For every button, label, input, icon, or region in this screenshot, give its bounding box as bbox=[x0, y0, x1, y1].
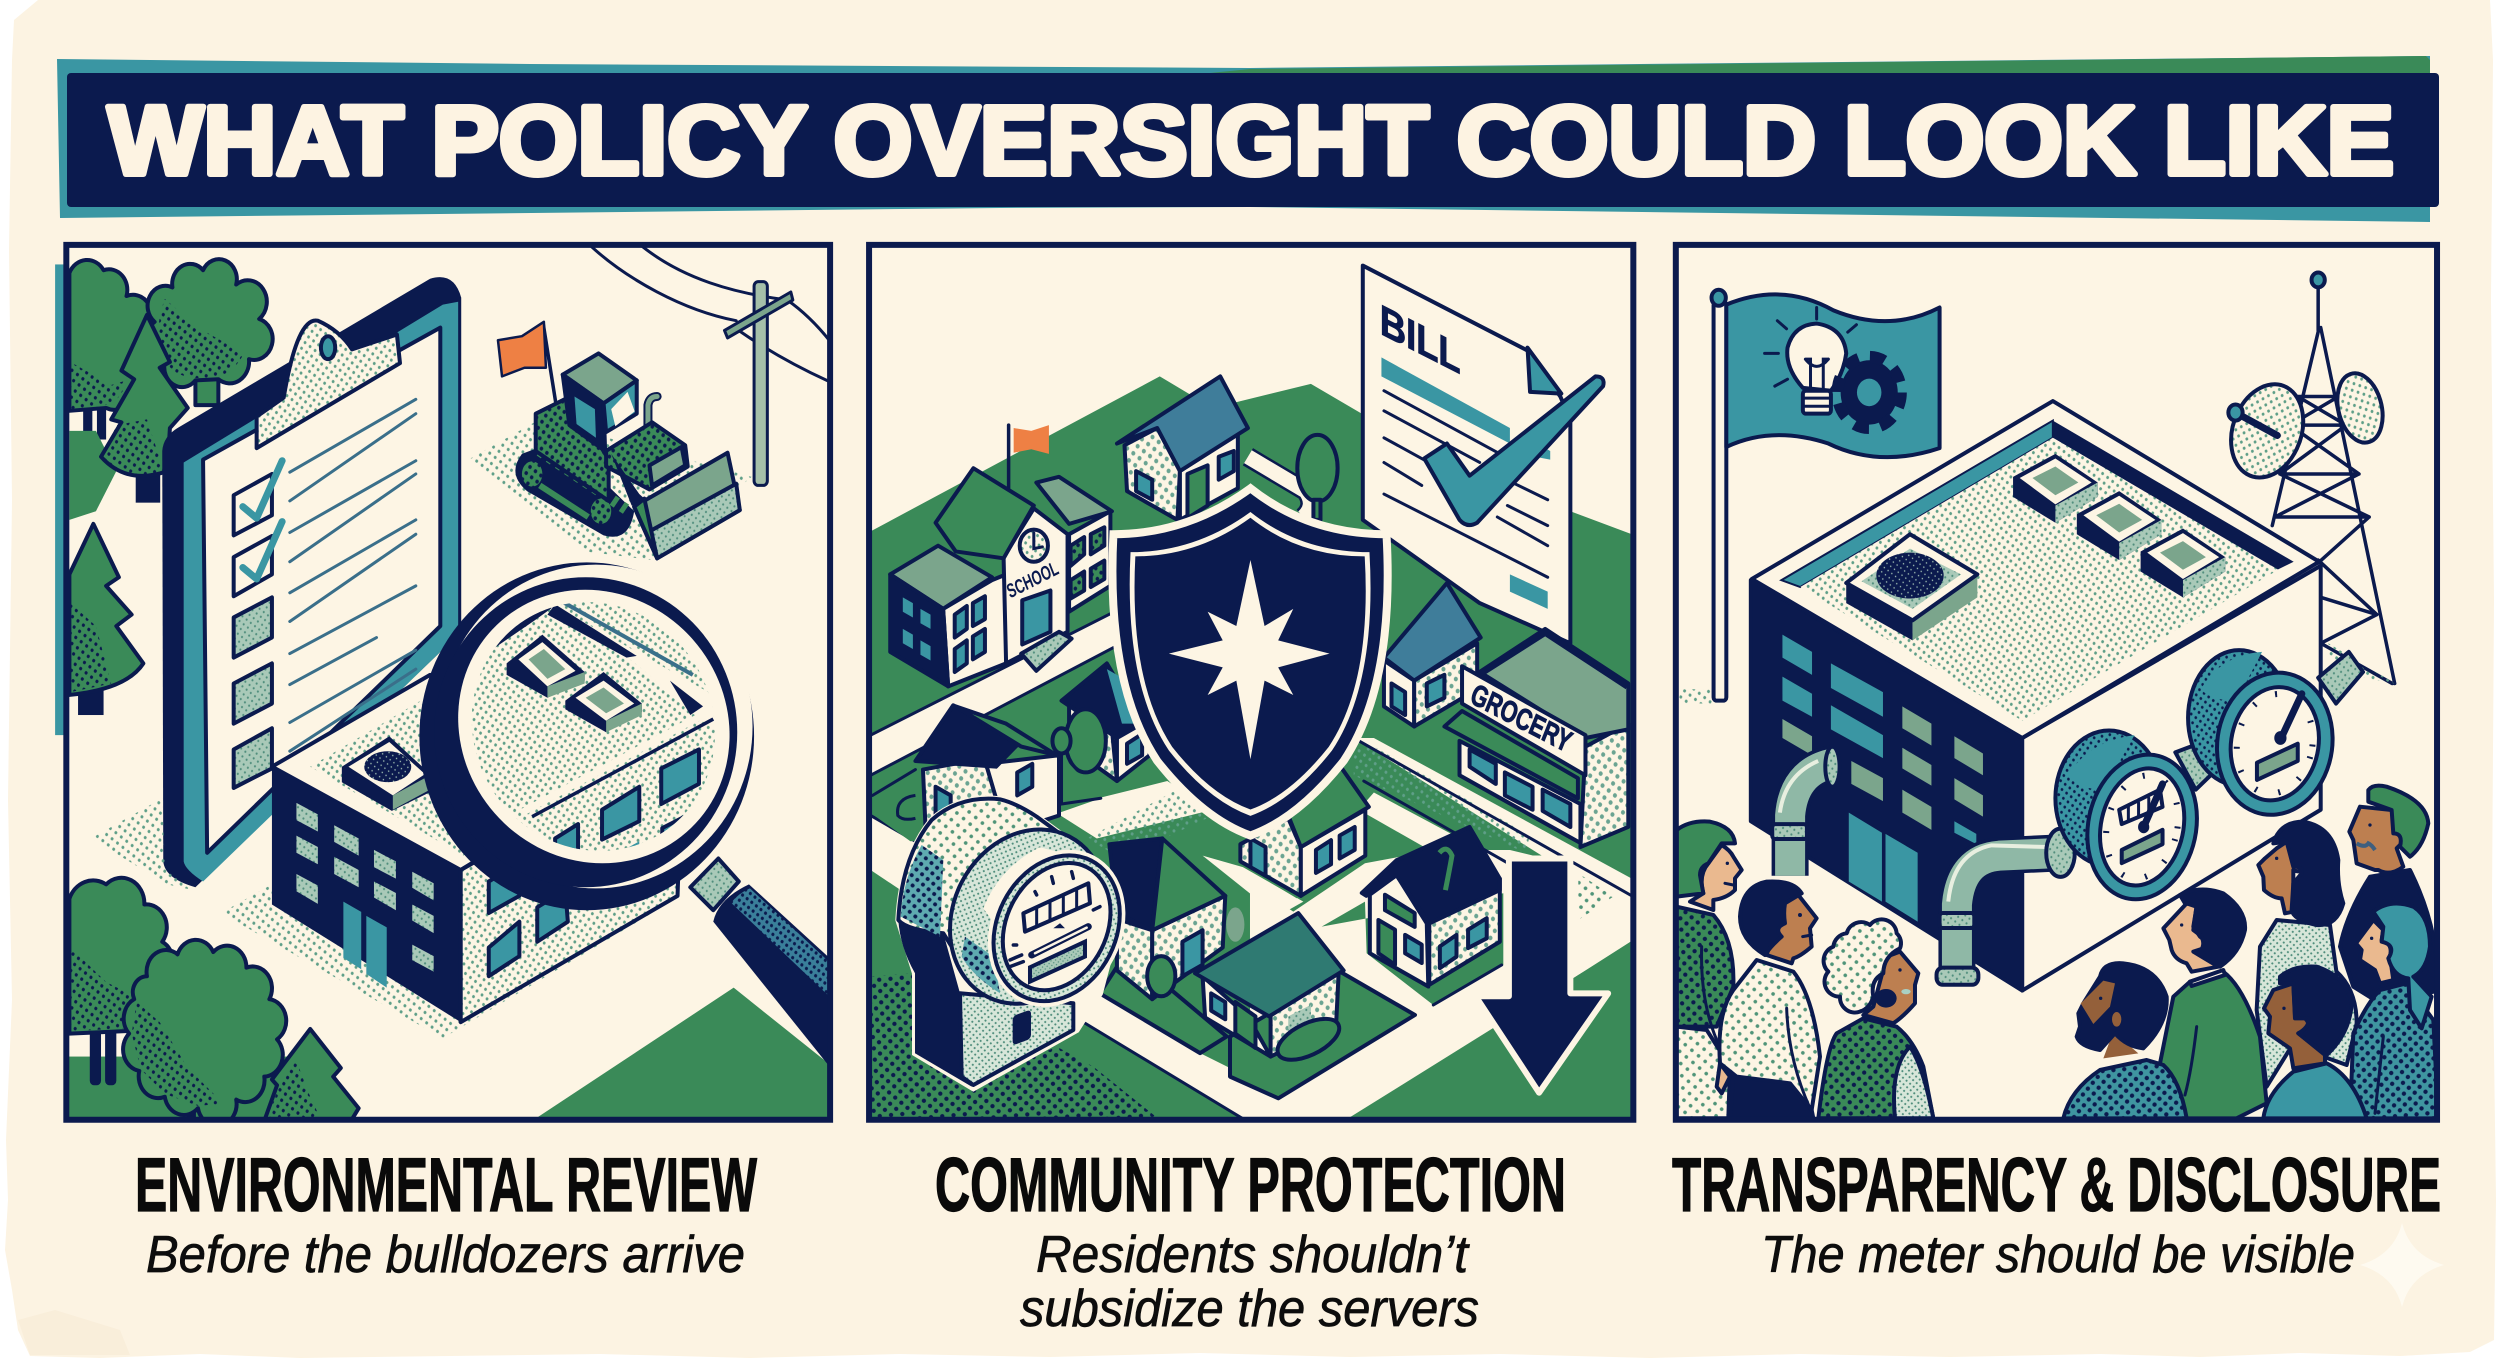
houses right of shield bbox=[1384, 583, 1481, 727]
heading: ENVIRONMENTAL REVIEW bbox=[135, 1143, 757, 1228]
checklist text lines bbox=[290, 399, 416, 751]
building windows bbox=[296, 803, 434, 972]
power lines bbox=[591, 246, 831, 485]
subheading: The meter should be visible bbox=[1761, 1226, 2355, 1284]
meter dial face bbox=[962, 826, 1152, 1031]
school flag bbox=[1007, 425, 1010, 488]
house front bbox=[1195, 913, 1344, 1068]
lawn by meter bbox=[1100, 959, 1227, 1053]
right house lawn bbox=[1322, 893, 1503, 1005]
survey flag bbox=[543, 325, 556, 405]
title banner bbox=[57, 56, 2439, 222]
heading: COMMUNITY PROTECTION bbox=[935, 1143, 1566, 1228]
meter dome bbox=[898, 799, 1087, 960]
banner teal offset bbox=[57, 56, 2430, 222]
ground shadows bbox=[91, 798, 672, 1038]
large check mark bbox=[1424, 376, 1604, 525]
grocery sign: GROCERY bbox=[1466, 677, 1577, 759]
magnified view inside lens bbox=[472, 602, 715, 851]
paper fold shading bbox=[18, 1310, 130, 1355]
data center building bbox=[1751, 401, 2363, 991]
shield with star bbox=[1112, 488, 1388, 836]
gear bbox=[1838, 357, 1901, 428]
banner navy bar bbox=[67, 73, 2439, 207]
magnified rooftop units bbox=[507, 635, 585, 698]
dark green ground by meter bbox=[870, 973, 1160, 1120]
crowd left group bbox=[1677, 821, 1933, 1118]
green field bbox=[532, 988, 831, 1121]
lower neighborhood houses bbox=[1109, 764, 1500, 1068]
rooftop fan unit bbox=[1846, 534, 1977, 640]
front house lawn bbox=[1230, 972, 1415, 1098]
meter dial rim bbox=[921, 802, 1136, 1031]
bulldozer with flag bbox=[468, 322, 752, 560]
meter base bbox=[960, 993, 1073, 1085]
subheading bbox=[1020, 1226, 1479, 1338]
house behind top bbox=[1117, 376, 1338, 520]
bill heading: BILL bbox=[1380, 295, 1461, 383]
boy in front bbox=[2263, 966, 2367, 1118]
checked box two bbox=[234, 522, 282, 596]
clipboard checklist bbox=[162, 277, 461, 887]
man with moustache bbox=[2340, 786, 2442, 1003]
houses left of shield bbox=[873, 663, 1150, 841]
teal misregistration sliver bbox=[55, 264, 68, 735]
meter digits bbox=[1023, 883, 1090, 932]
subheading: Residents shouldn’t bbox=[1036, 1226, 1470, 1284]
flag with bulb and gear bbox=[1712, 290, 1940, 701]
panel: community protection bbox=[869, 244, 1633, 1123]
electric meter bbox=[898, 799, 1152, 1088]
front pipe bbox=[1937, 829, 2075, 985]
left pipe bbox=[1772, 747, 1840, 876]
banner green offset bbox=[1200, 56, 2430, 74]
top left trees bbox=[69, 259, 273, 520]
building windows and doors bbox=[1782, 635, 1983, 922]
connector pipes bbox=[2175, 652, 2363, 790]
road outlines bbox=[871, 612, 1632, 1121]
roads bbox=[871, 612, 1632, 1121]
grocery store bbox=[1444, 629, 1628, 847]
school building bbox=[890, 425, 1112, 686]
subheading: Before the bulldozers arrive bbox=[146, 1226, 745, 1284]
resident in green sweater bbox=[2160, 890, 2267, 1118]
bearded resident bbox=[2063, 963, 2187, 1118]
house center bbox=[1240, 764, 1369, 896]
radio tower bbox=[2217, 272, 2395, 683]
north star bbox=[1169, 560, 1330, 759]
sparkle watermark bbox=[2360, 1223, 2444, 1307]
caption: environmental review bbox=[135, 1143, 757, 1284]
caption: community protection bbox=[935, 1143, 1566, 1338]
meter halo bbox=[898, 799, 1120, 1088]
bottom right roads and lawns bbox=[1230, 850, 1633, 1123]
light bulb bbox=[1765, 307, 1856, 414]
panel: transparency and disclosure bbox=[1674, 244, 2442, 1123]
house with chimney mark bbox=[1362, 827, 1500, 987]
gauge two bbox=[2188, 650, 2349, 832]
panel: environmental review bbox=[55, 244, 831, 1126]
bottom left trees bbox=[69, 878, 359, 1126]
satellite dishes bbox=[2217, 367, 2390, 492]
rooftop unit bbox=[342, 736, 432, 811]
meter neck bbox=[898, 920, 972, 1087]
panel frame bbox=[869, 245, 1633, 1120]
bill document with check bbox=[1363, 266, 1604, 643]
school clock bbox=[1020, 530, 1048, 562]
woman with teal hair bbox=[2350, 903, 2438, 1118]
panel frame bbox=[1676, 245, 2437, 1120]
title text: WHAT POLICY OVERSIGHT COULD LOOK LIKE bbox=[108, 86, 2394, 195]
rooftop vents bbox=[2013, 454, 2225, 597]
green neighborhood ground bbox=[871, 376, 1632, 1121]
utility pole bbox=[754, 282, 767, 485]
magnifying glass bbox=[419, 556, 831, 1068]
gauge one bbox=[2055, 731, 2213, 915]
clipboard clip bbox=[257, 320, 400, 448]
down arrow bbox=[1476, 859, 1608, 1093]
resident far left bbox=[1677, 821, 1742, 1118]
house by meter bbox=[1109, 838, 1244, 999]
school sign: SCHOOL bbox=[1003, 556, 1061, 603]
checked box one bbox=[234, 461, 282, 535]
woman with long hair bbox=[2257, 822, 2357, 1087]
caption: transparency and disclosure bbox=[1672, 1143, 2441, 1284]
subheading: subsidize the servers bbox=[1020, 1280, 1479, 1338]
building under review bbox=[272, 675, 683, 1022]
resident with curly hair bbox=[1818, 919, 1933, 1118]
unchecked boxes bbox=[234, 597, 272, 788]
panel frame bbox=[66, 245, 830, 1120]
resident in spotted shirt bbox=[1719, 881, 1820, 1118]
left pine tree bbox=[69, 524, 143, 715]
crowd right group bbox=[2063, 786, 2442, 1118]
magnifier handle bbox=[690, 859, 831, 1068]
